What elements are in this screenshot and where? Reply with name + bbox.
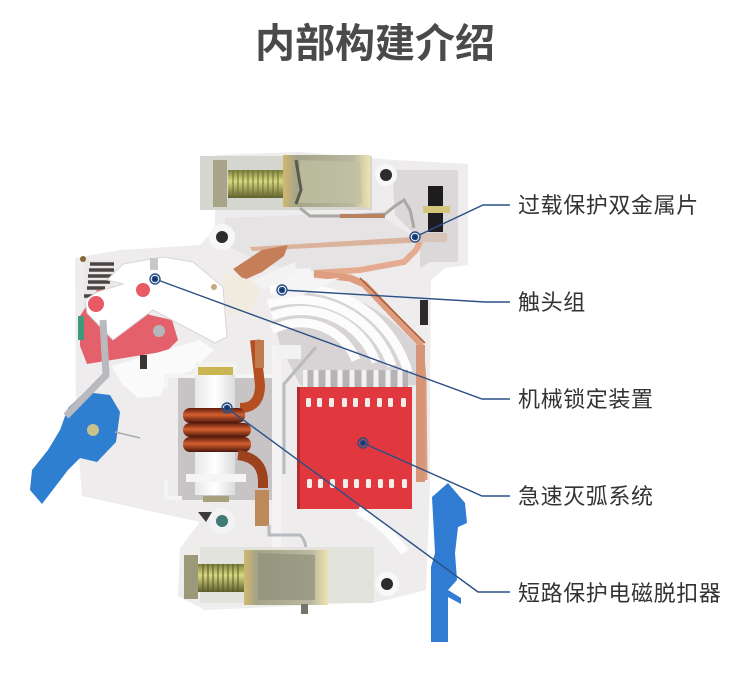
bottom screw hole xyxy=(375,572,399,596)
white ceramic core xyxy=(186,362,246,502)
green tab xyxy=(78,316,84,340)
left spring xyxy=(80,256,114,330)
lower arcs xyxy=(358,510,405,552)
label: short-circuit magnetic release: 短路保护电磁脱扣器 xyxy=(518,581,721,606)
leader line: arc system xyxy=(358,438,510,496)
blue wheel and handle xyxy=(30,392,140,504)
leader line: mechanical lock xyxy=(150,274,510,399)
title: 内部构建介绍 xyxy=(255,22,495,66)
top screw hole xyxy=(209,164,397,250)
bottom terminal xyxy=(184,547,374,614)
braided copper xyxy=(233,245,288,280)
copper coil xyxy=(183,340,269,526)
upper right recess xyxy=(392,170,458,268)
copper bar right of block xyxy=(416,345,425,482)
top terminal xyxy=(200,155,372,210)
housing body xyxy=(75,152,468,610)
teal rivet xyxy=(198,508,235,534)
bimetal strip and adjusting screw xyxy=(250,186,450,251)
metal rod xyxy=(66,320,106,416)
blue lever xyxy=(431,483,467,642)
leader line: overload bimetal xyxy=(410,205,510,242)
coil housing xyxy=(166,345,281,550)
pink pivot dots xyxy=(88,283,150,312)
arc chute white fan xyxy=(268,287,408,372)
white trip lever xyxy=(85,257,227,343)
copper contact bars xyxy=(314,242,425,480)
red arc extinguisher block xyxy=(297,387,412,509)
arc plates xyxy=(302,370,408,388)
leader line: contacts xyxy=(277,285,510,302)
label: rapid arc extinguishing: 急速灭弧系统 xyxy=(518,484,654,509)
label: overload bimetal: 过载保护双金属片 xyxy=(518,193,699,218)
label: mechanical lock: 机械锁定装置 xyxy=(518,387,654,412)
white contact arm xyxy=(223,272,262,316)
pink latch xyxy=(80,286,178,364)
lower white mechanism xyxy=(112,340,214,398)
silver wire xyxy=(269,347,316,552)
leader line: short-circuit release xyxy=(222,403,510,592)
label: contact group: 触头组 xyxy=(518,290,586,315)
breaker photo illustration xyxy=(30,152,468,642)
fan background xyxy=(268,291,416,385)
